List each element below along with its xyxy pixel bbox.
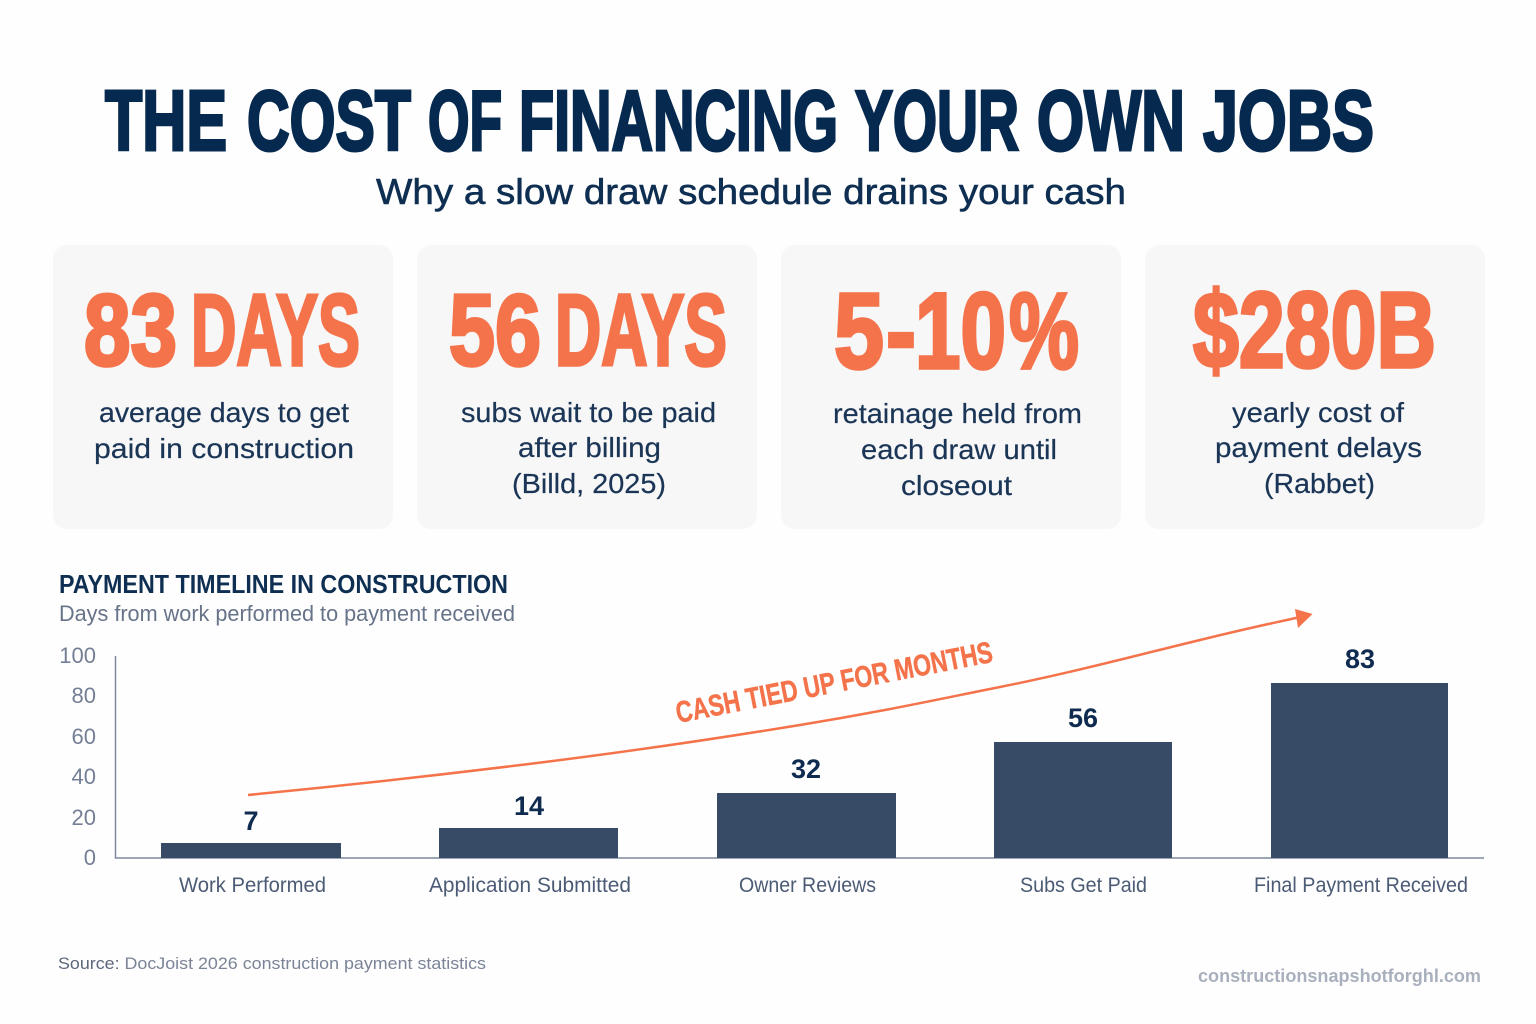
y axis labels: 80 (72, 683, 96, 708)
bar: Final Payment Received: 83 (1345, 644, 1375, 674)
panel: 56 days stat card (417, 245, 757, 529)
y axis labels: 20 (72, 805, 96, 830)
description: $280B: (Rabbet) (1264, 468, 1375, 499)
description: $280B: payment delays (1215, 432, 1422, 463)
description: 83 days: paid in construction (94, 433, 354, 464)
website credit: constructionsnapshotforghl.com (1198, 966, 1481, 986)
description: $280B: yearly cost of (1232, 397, 1404, 428)
stat: 5-10%: 5 (834, 270, 884, 391)
panel: retainage stat card (781, 245, 1121, 529)
y axis labels: 40 (72, 764, 96, 789)
bar: Work Performed: Work Performed (179, 874, 326, 897)
stat: 5-10% (834, 270, 1079, 391)
panel: $280B stat card (1145, 245, 1485, 529)
stat: 56 days: DAYS (555, 275, 727, 387)
callout: cash tied up for months: CASH TIED UP FOR MONTHS (673, 636, 995, 730)
description: 56 days: (Billd, 2025) (512, 468, 666, 499)
bar chart: payment timeline (59, 643, 1484, 897)
title (105, 74, 1374, 169)
stat: 56 days: 56 (449, 275, 541, 387)
bar: Final Payment Received: Final Payment Received (1254, 874, 1468, 897)
y axis labels: 100 (59, 643, 96, 668)
description: retainage: retainage held from (833, 398, 1082, 429)
panel: 83 days stat card (53, 245, 393, 529)
bar: Work Performed: 7 (243, 806, 259, 836)
bar: Final Payment Received (1254, 644, 1468, 897)
bar: Application Submitted: 14 (514, 791, 544, 821)
description: $280B (1215, 397, 1422, 499)
title: YOUR (855, 74, 1019, 169)
title: THE (105, 74, 227, 169)
title: JOBS (1203, 74, 1374, 169)
y axis labels (59, 643, 96, 870)
bar: Work Performed (161, 806, 341, 897)
stat: $280B: $280B (1193, 269, 1436, 390)
source note: Source: DocJoist 2026 construction payment statistics (58, 954, 486, 973)
description: 56 days (461, 397, 716, 499)
chart heading: PAYMENT TIMELINE IN CONSTRUCTION (59, 569, 508, 599)
description: retainage: closeout (901, 470, 1012, 501)
y axis labels: 0 (84, 845, 96, 870)
bar: Application Submitted: Application Submitted (429, 874, 631, 897)
bar: Subs Get Paid: Subs Get Paid (1020, 874, 1147, 897)
stat: 5-10%: 10 (915, 270, 1006, 391)
stat: 5-10%: % (1009, 270, 1079, 391)
description: 83 days: average days to get (99, 397, 349, 428)
stat: 5-10%: - (886, 270, 916, 391)
title: OF (428, 74, 502, 169)
arrow: rising cash curve (248, 609, 1312, 795)
title: OWN (1037, 74, 1185, 169)
bar: Subs Get Paid: 56 (1068, 703, 1098, 733)
stat: 83 days (84, 275, 360, 387)
description: retainage (833, 398, 1082, 501)
bar: Owner Reviews: Owner Reviews (739, 874, 876, 897)
bar: Application Submitted (429, 791, 631, 897)
title: COST (247, 74, 411, 169)
y axis labels: 60 (72, 724, 96, 749)
description: retainage: each draw until (861, 434, 1057, 465)
chart subheading: Days from work performed to payment received (59, 601, 515, 626)
stat: 56 days (449, 275, 727, 387)
bar: Subs Get Paid (994, 703, 1172, 897)
title: FINANCING (519, 74, 838, 169)
stat: 83 days: 83 (84, 275, 177, 387)
description: 56 days: subs wait to be paid (461, 397, 716, 428)
bar: Owner Reviews: 32 (791, 754, 821, 784)
description: 56 days: after billing (518, 432, 661, 463)
subtitle: Why a slow draw schedule drains your cash (376, 171, 1126, 212)
bar: Owner Reviews (717, 754, 896, 897)
stat: 83 days: DAYS (191, 275, 360, 387)
description: 83 days (94, 397, 354, 464)
